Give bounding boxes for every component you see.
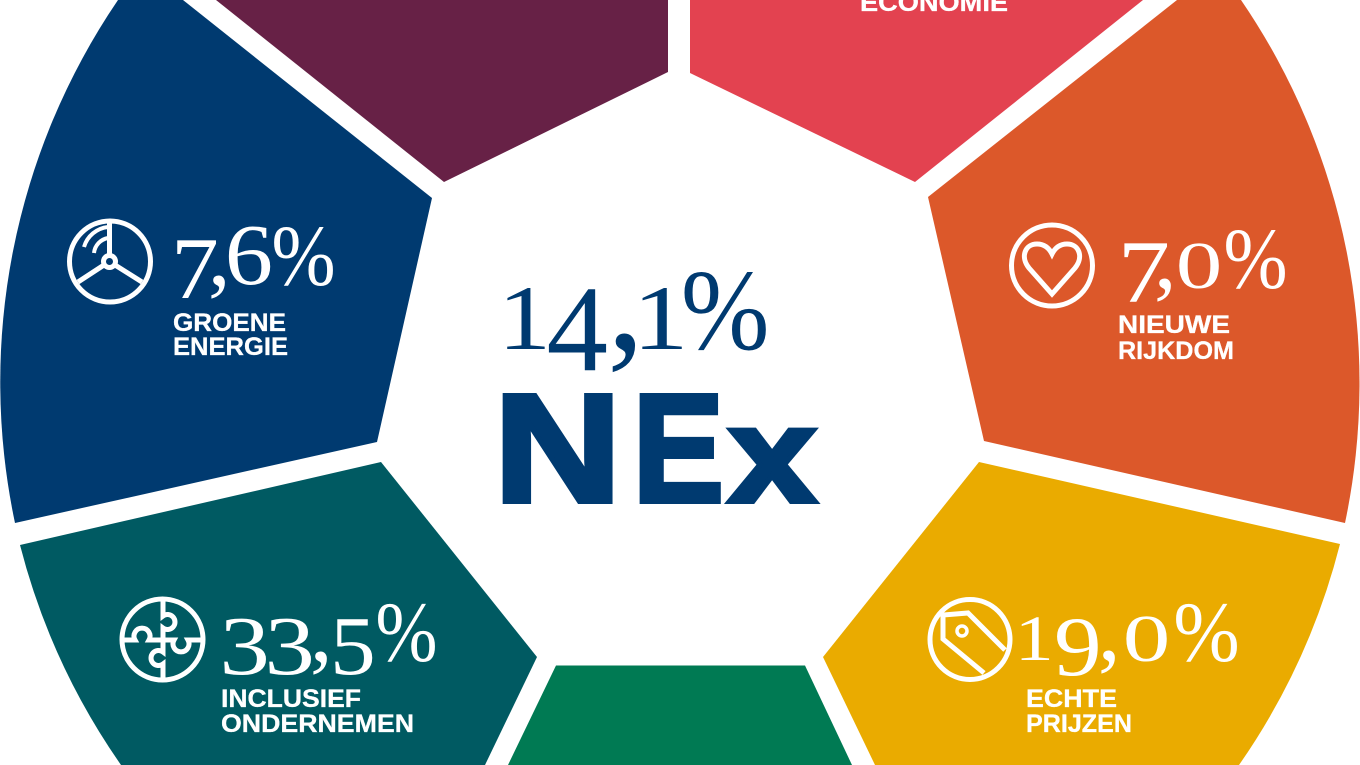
- icon: puzzle: [122, 599, 203, 680]
- panel: echte prijzen: [823, 462, 1340, 765]
- value: 7,0%: 0: [1176, 229, 1222, 303]
- value: 7,6%: 7: [171, 219, 219, 317]
- segment: teal: [20, 462, 537, 765]
- segment: yellow: [823, 462, 1340, 765]
- value: 33,5%: 3: [264, 600, 315, 693]
- label: groene energie: ENERGIE: [173, 333, 288, 361]
- label: inclusief ondernemen: INCLUSIEF: [221, 685, 361, 713]
- value: 14,1%: 1: [632, 268, 688, 370]
- value: 19,0%: %: [1173, 584, 1240, 680]
- label: inclusief ondernemen: ONDERNEMEN: [221, 710, 414, 738]
- value: 14,1%: 4: [546, 260, 608, 397]
- value: 19,0%: 9: [1054, 600, 1102, 694]
- label: groene energie: [173, 309, 288, 361]
- title: NEx: x: [728, 380, 816, 531]
- label: inclusief ondernemen: [221, 685, 414, 738]
- panel: red segment, economie: [690, 0, 1143, 182]
- value: 7,6%: ,: [208, 206, 230, 305]
- value: 7,0%: ,: [1154, 209, 1176, 308]
- panel: green segment: [508, 666, 852, 765]
- panel: nieuwe rijkdom: [928, 0, 1360, 523]
- segment: navy: [0, 0, 432, 523]
- value: 14,1%: %: [681, 247, 770, 375]
- panel: inclusief ondernemen: [20, 462, 537, 765]
- value: 7,6%: [171, 206, 336, 317]
- center figure: 14,1% NEx: [494, 216, 816, 535]
- icon: heart: [1012, 225, 1092, 306]
- value: 33,5%: 5: [330, 600, 376, 693]
- icon: wind turbine: [70, 221, 150, 302]
- panel: groene energie: [0, 0, 432, 523]
- value: 33,5%: [220, 582, 437, 693]
- value: 7,0%: %: [1224, 211, 1288, 307]
- value: 7,6%: 6: [225, 206, 273, 303]
- value: 14,1%: [498, 216, 770, 397]
- value: 19,0%: 1: [1015, 602, 1054, 674]
- value: 19,0%: ,: [1098, 581, 1120, 680]
- label: echte prijzen: ECHTE: [1026, 685, 1117, 713]
- segment: orange: [928, 0, 1360, 523]
- label: echte prijzen: [1026, 685, 1132, 738]
- icon: price tag: [930, 600, 1010, 680]
- title: NEx: E: [633, 362, 724, 534]
- value: 33,5%: %: [376, 585, 437, 680]
- title: NEx: N: [494, 363, 622, 535]
- value: 19,0%: [1015, 581, 1240, 694]
- value: 19,0%: 0: [1123, 602, 1170, 676]
- label: groene energie: GROENE: [173, 309, 286, 337]
- value: 7,0%: [1118, 209, 1288, 322]
- label: nieuwe rijkdom: [1118, 311, 1234, 365]
- value: 33,5%: 3: [220, 600, 270, 693]
- value: 14,1%: ,: [607, 216, 644, 382]
- panel: plum segment: [216, 0, 668, 182]
- value: 33,5%: ,: [310, 582, 332, 681]
- value: 7,6%: %: [272, 208, 336, 304]
- title: NEx: [494, 362, 816, 535]
- label: nieuwe rijkdom: NIEUWE: [1118, 311, 1230, 339]
- value: 7,0%: 7: [1118, 223, 1170, 322]
- label: nieuwe rijkdom: RIJKDOM: [1118, 337, 1234, 365]
- label: echte prijzen: PRIJZEN: [1026, 710, 1132, 738]
- value: 14,1%: 1: [498, 267, 551, 369]
